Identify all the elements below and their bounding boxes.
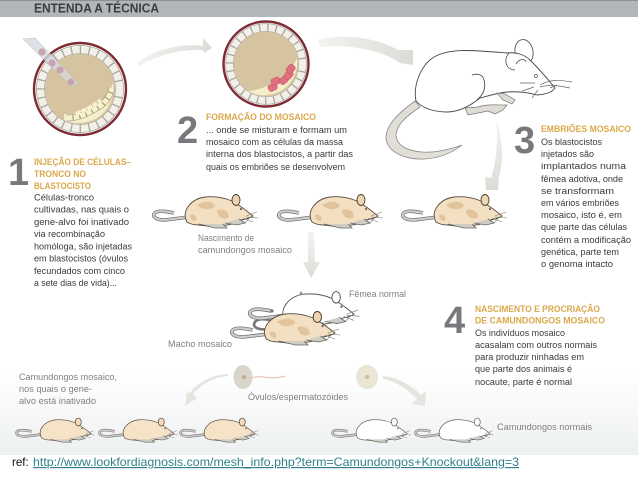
icon: egg and sperm bbox=[234, 365, 378, 389]
mouse: mosaic newborn 1 bbox=[154, 194, 258, 228]
reference line: ref: bbox=[12, 456, 29, 469]
label: mosaic offspring: nos quais o gene- bbox=[19, 384, 92, 394]
label: newborn mosaics: camundongos mosaico bbox=[198, 245, 292, 255]
text: step 3: mosaico, isto é, em bbox=[541, 210, 622, 220]
icon: blastocyst with injection bbox=[23, 38, 126, 135]
text: step 1: a sete dias de vida)... bbox=[34, 278, 117, 288]
mouse: normal female bbox=[250, 292, 359, 329]
mouse: mosaic newborn 2 bbox=[279, 194, 383, 228]
text: step 1: TRONCO NO bbox=[34, 169, 86, 179]
text: step 3: o genoma intacto bbox=[541, 259, 613, 269]
text: step 4: nocaute, parte é normal bbox=[475, 377, 572, 387]
arrow: step 1 to 2 bbox=[137, 38, 212, 66]
number 3: 3 bbox=[514, 120, 535, 162]
icon: large white mouse bbox=[386, 38, 572, 159]
text: step 3: implantados numa bbox=[541, 161, 626, 171]
number 2: 2 bbox=[177, 110, 198, 152]
text: step 4: para produzir ninhadas em bbox=[475, 352, 584, 362]
label: newborn mosaics: Nascimento de bbox=[198, 233, 254, 243]
arrow: step 3 to newborns bbox=[485, 120, 502, 190]
text: step 3 bbox=[541, 124, 631, 269]
text: step 1: fecundados com cinco bbox=[34, 266, 125, 276]
text: step 2: ... onde se misturam e formam um bbox=[206, 125, 347, 135]
header bar: ENTENDA A TÉCNICA bbox=[34, 0, 159, 16]
number 1: 1 bbox=[8, 152, 29, 194]
text: step 3: em vários embriões bbox=[541, 198, 619, 208]
text: step 2 bbox=[206, 112, 354, 172]
number 4: 4 bbox=[444, 300, 465, 342]
text: step 4 bbox=[475, 304, 605, 387]
label: mosaic offspring: Camundongos mosaico, bbox=[19, 372, 117, 382]
arrow: to normal offspring bbox=[383, 376, 426, 406]
text: step 3: Os blastocistos bbox=[541, 137, 602, 147]
icon: blastocyst mosaic bbox=[224, 22, 308, 106]
label: mosaic offspring bbox=[19, 372, 117, 406]
text: step 1: em blastocistos (óvulos bbox=[34, 254, 128, 264]
text: step 3: injetados são bbox=[541, 149, 594, 159]
text: step 3: se transformam bbox=[541, 186, 614, 196]
label: gametes: Óvulos/espermatozóides bbox=[248, 392, 348, 402]
arrow: to mosaic offspring bbox=[185, 374, 228, 406]
text: step 4: NASCIMENTO E PROCRIAÇÃO bbox=[475, 304, 600, 314]
text: step 2: interna dos blastocistos, a partir das bbox=[206, 149, 354, 159]
text: step 3: contém a modificação bbox=[541, 235, 631, 245]
text: step 2: quais os embriões se desenvolvem bbox=[206, 162, 345, 172]
label: male: Macho mosaico bbox=[168, 339, 232, 349]
header bar bbox=[0, 0, 638, 17]
text: step 4: que parte dos animais é bbox=[475, 364, 572, 374]
arrow: down to couple bbox=[303, 232, 320, 278]
text: step 1: Células-tronco bbox=[34, 192, 94, 202]
mouse: knockout 1 bbox=[17, 418, 95, 442]
text: step 1: INJEÇÃO DE CÉLULAS– bbox=[34, 157, 131, 167]
text: step 3: que parte das células bbox=[541, 222, 627, 232]
reference line: http://www.lookfordiagnosis.com/mesh_info.php?term=Camundongos+Knockout&lang=3 bbox=[33, 456, 519, 469]
text: step 1: via recombinação bbox=[34, 229, 105, 239]
mouse: knockout 3 bbox=[181, 418, 259, 442]
text: step 1 bbox=[34, 157, 132, 288]
mouse: mosaic male bbox=[232, 312, 340, 345]
mouse: mosaic newborn 3 bbox=[403, 194, 507, 228]
text: step 3: genética, parte tem bbox=[541, 247, 619, 257]
mouse: knockout 2 bbox=[100, 418, 178, 442]
label: mosaic offspring: alvo está inativado bbox=[19, 396, 96, 406]
text: step 1: BLASTOCISTO bbox=[34, 181, 91, 191]
label: normal offspring: Camundongos normais bbox=[497, 422, 592, 432]
text: step 3: fêmea adotiva, onde bbox=[541, 174, 623, 184]
text: step 2: mosaico com as células da massa bbox=[206, 137, 343, 147]
text: step 2: FORMAÇÃO DO MOSAICO bbox=[206, 112, 316, 122]
text: step 4: DE CAMUNDONGOS MOSAICO bbox=[475, 316, 605, 326]
arrow: step 2 to 3 bbox=[318, 37, 413, 65]
label: female: Fêmea normal bbox=[349, 289, 406, 299]
text: step 3: EMBRIÕES MOSAICO bbox=[541, 124, 631, 134]
mouse: normal 1 bbox=[333, 418, 411, 442]
text: step 4: acasalam com outros normais bbox=[475, 340, 598, 350]
text: step 1: gene-alvo foi inativado bbox=[34, 217, 129, 227]
text: step 1: homóloga, são injetadas bbox=[34, 241, 132, 251]
mouse: normal 2 bbox=[416, 418, 494, 442]
label: newborn mosaics bbox=[198, 233, 292, 255]
text: step 1: cultivadas, nas quais o bbox=[34, 205, 129, 215]
text: step 4: Os indivíduos mosaico bbox=[475, 328, 565, 338]
